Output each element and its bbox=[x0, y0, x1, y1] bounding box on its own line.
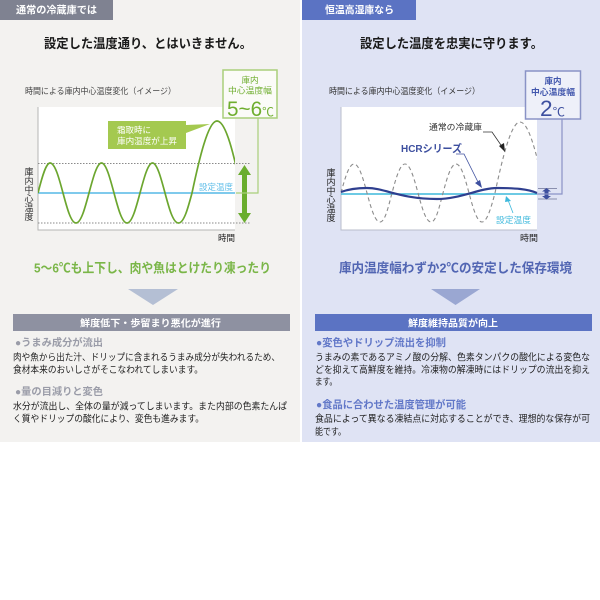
result bar: left: 鮮度低下・歩留まり悪化が進行 bbox=[80, 318, 222, 330]
heading: right title: 設定した温度を忠実に守ります。 bbox=[360, 36, 543, 51]
label: conventional refrigerator: 通常の冷蔵庫 bbox=[429, 122, 483, 132]
tab: constant temperature: 恒温高湿庫なら bbox=[325, 4, 394, 16]
panel: conventional refrigerator bbox=[0, 0, 300, 442]
label: set temperature bbox=[496, 196, 531, 225]
arrow: right down triangle bbox=[431, 289, 480, 305]
callout box: temperature width 5-6C bbox=[223, 70, 277, 193]
callout box: temperature width 5-6C: 5~6℃ bbox=[227, 98, 274, 121]
text block: discolouration control: ます。 bbox=[315, 377, 337, 388]
label: HCR series: HCRシリーズ bbox=[401, 142, 462, 155]
text block: weight loss and discolouration: く質やドリップの酸化により、変色も進みます。 bbox=[13, 413, 204, 425]
text block: umami loss: 食材本来のおいしさがそこなわれてしまいます。 bbox=[13, 364, 203, 376]
callout: defrost temperature rise bbox=[108, 121, 210, 149]
panel: constant temperature high humidity bbox=[302, 0, 600, 442]
text block: discolouration control: ●変色やドリップ流出を抑制 bbox=[316, 336, 446, 349]
result bar: right: 鮮度維持品質が向上 bbox=[408, 318, 499, 330]
callout box: temperature width 2C: 中心温度幅 bbox=[531, 87, 576, 97]
arrow: left down triangle bbox=[128, 289, 178, 305]
text block: discolouration control bbox=[315, 336, 590, 388]
axis label: core temperature: 温 bbox=[326, 204, 336, 214]
headline: right result: 庫内温度幅わずか2℃の安定した保存環境 bbox=[339, 260, 572, 276]
arrow: temperature range bbox=[238, 165, 251, 223]
text block: weight loss and discolouration: ●量の目減りと変色 bbox=[15, 385, 103, 398]
callout box: temperature width 2C: 2℃ bbox=[540, 96, 565, 121]
chart caption: left: 時間による庫内中心温度変化（イメージ） bbox=[25, 86, 176, 96]
tab: conventional refrigerator bbox=[0, 0, 113, 20]
text block: temperature management bbox=[315, 398, 590, 438]
axis label: core temperature: 中 bbox=[24, 184, 34, 195]
axis label: core temperature: 心 bbox=[24, 193, 34, 204]
callout box: temperature width 5-6C: 庫内 bbox=[241, 75, 259, 85]
tab: conventional refrigerator: 通常の冷蔵庫では bbox=[16, 4, 97, 16]
result bar: left bbox=[13, 314, 290, 331]
axis label: core temperature: 中 bbox=[326, 185, 336, 196]
tab: constant temperature bbox=[302, 0, 416, 20]
text block: weight loss and discolouration: 水分が流出し、全体の量が減ってしまいます。また内部の色素たんぱ bbox=[13, 400, 287, 412]
axis label: core temperature: 内 bbox=[326, 176, 336, 187]
label: HCR series bbox=[401, 142, 482, 188]
arrow: temperature range 2C bbox=[538, 188, 557, 200]
axis label: time: 時間 bbox=[218, 233, 235, 243]
callout box: temperature width 5-6C: 中心温度幅 bbox=[228, 86, 273, 96]
axis label: core temperature: 温 bbox=[24, 203, 34, 213]
axis label: time: 時間 bbox=[520, 233, 538, 243]
callout: defrost temperature rise: 霜取時に bbox=[117, 125, 151, 135]
line chart: HCR vs conventional bbox=[326, 107, 545, 243]
label: set temperature: 設定温度 bbox=[199, 182, 233, 192]
callout box: temperature width 2C: 庫内 bbox=[544, 76, 562, 86]
text block: umami loss bbox=[13, 336, 280, 376]
text block: umami loss: 肉や魚から出た汁、ドリップに含まれるうまみ成分が失われるため、 bbox=[13, 352, 280, 364]
heading: left title: 設定した温度通り、とはいきません。 bbox=[44, 36, 252, 51]
axis label: core temperature: 度 bbox=[326, 212, 336, 223]
axis label: core temperature: 心 bbox=[326, 194, 336, 205]
label: conventional refrigerator bbox=[429, 122, 505, 152]
text block: weight loss and discolouration bbox=[13, 385, 287, 425]
text block: temperature management: 能です。 bbox=[315, 426, 346, 438]
headline: left result: 5～6℃も上下し、肉や魚はとけたり凍ったり bbox=[34, 260, 271, 276]
axis label: core temperature: 度 bbox=[24, 211, 34, 222]
line chart: conventional temperature swing bbox=[24, 107, 251, 243]
text block: temperature management: ●食品に合わせた温度管理が可能 bbox=[316, 398, 466, 411]
callout box: temperature width 2C bbox=[526, 71, 580, 194]
text block: umami loss: ●うまみ成分が流出 bbox=[15, 336, 103, 349]
axis label: core temperature: 内 bbox=[24, 175, 34, 186]
axis label: core temperature: 庫 bbox=[24, 166, 34, 177]
chart caption: right: 時間による庫内中心温度変化（イメージ） bbox=[329, 86, 480, 96]
axis label: core temperature: 庫 bbox=[326, 167, 336, 178]
text block: temperature management: 食品によって異なる凍結点に対応することができ、理想的な保存が可 bbox=[315, 413, 590, 425]
callout: defrost temperature rise: 庫内温度が上昇 bbox=[117, 136, 177, 146]
result bar: right bbox=[315, 314, 592, 331]
label: set temperature: 設定温度 bbox=[496, 215, 531, 225]
